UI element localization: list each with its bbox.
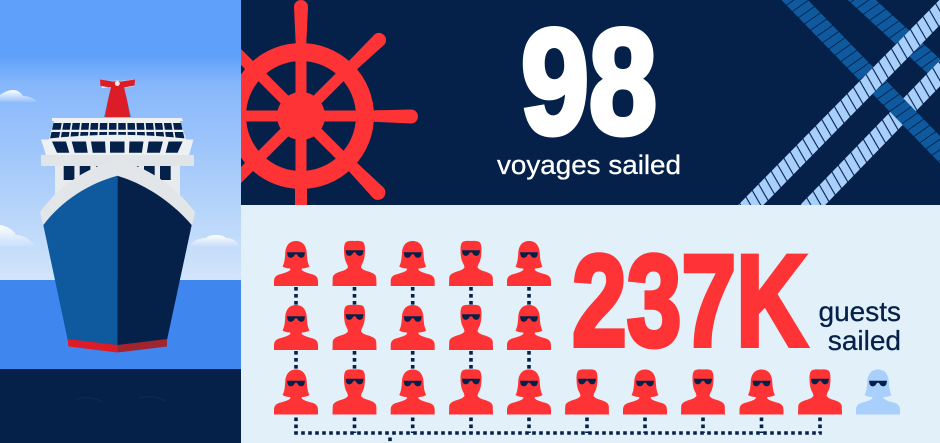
water reflections [76,397,166,402]
upper deck [41,140,194,155]
top deck windows [49,122,186,141]
panel: ship scene [0,0,241,443]
panel background [241,0,940,205]
upper deck windows [52,142,183,153]
people row 2 [274,305,551,350]
foreground water [0,369,241,443]
people row 1 [274,241,551,286]
cloud: upper left [0,90,37,102]
waterline shadow [117,339,167,352]
hull starboard side [117,176,192,346]
label: voyages sailed: voyages sailed [497,150,681,180]
ship [40,80,195,352]
superstructure [55,160,180,200]
stat: 98: 98 [521,0,657,165]
person: highlighted blue [856,370,900,414]
lower windows [64,166,171,180]
dotted connectors [294,287,822,443]
stat: 237K: 237K [572,229,807,374]
cloud: right [190,235,240,246]
superstructure band [41,155,194,166]
label: guests sailed: guests [818,296,901,327]
funnel [100,80,135,117]
waterline [68,339,117,352]
cloud: lower left [0,225,35,246]
panel background [241,205,940,443]
label: guests sailed [818,296,901,356]
hull port side [43,176,117,346]
people row 3 [274,369,842,414]
sky [0,0,241,281]
ropes [741,0,940,215]
panel: guests [241,205,940,443]
bow deck [40,160,195,226]
top deck [49,118,186,139]
label: guests sailed: sailed [828,325,901,356]
sea [0,280,241,370]
panel: voyages [230,0,940,215]
icon: ship wheel [241,0,418,205]
